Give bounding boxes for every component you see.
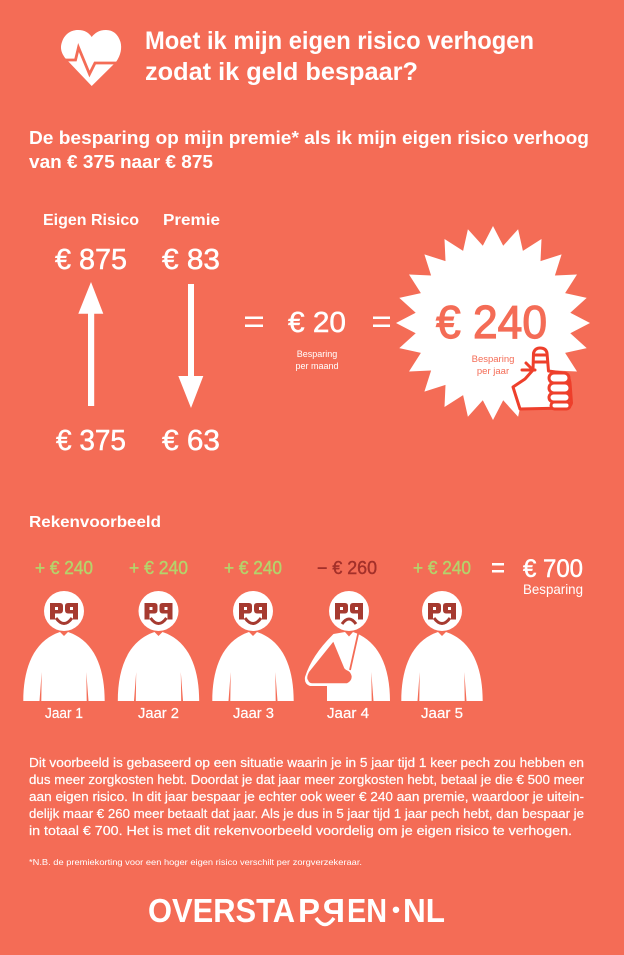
monthly saving <box>288 307 346 371</box>
monthly saving: per maand <box>295 361 339 371</box>
yearly saving label: Besparing <box>472 354 514 365</box>
column headings: Premie <box>163 212 220 229</box>
yearly amounts: + € 240 <box>129 558 188 578</box>
icon: thumbs up <box>513 348 572 409</box>
logo: overstappen.nl <box>148 892 445 929</box>
explanation paragraph: delijk maar € 260 meer betaalt dat jaar. Als je dus in 5 jaar tijd 1 jaar pech hebt, dan bespaar je <box>29 807 584 821</box>
logo: overstappen.nl: NL <box>403 892 445 929</box>
year labels: Jaar 5 <box>421 706 463 722</box>
explanation paragraph: Dit voorbeeld is gebaseerd op een situatie waarin je in 5 jaar tijd 1 keer pech zou hebben en <box>29 756 584 770</box>
arrow up <box>78 282 103 406</box>
column headings: Eigen Risico <box>43 212 139 229</box>
title <box>145 27 534 86</box>
year labels: Jaar 2 <box>138 706 179 722</box>
explanation paragraph: dus meer zorgkosten hebt. Doordat je dat jaar meer zorgkosten hebt, betaal je die € 500 meer <box>29 773 584 787</box>
eigen risico high value: € 875 <box>55 244 127 276</box>
year labels: Jaar 1 <box>45 706 83 722</box>
icon: heart with heartbeat <box>61 30 121 86</box>
yearly amounts <box>35 558 471 578</box>
person: jaar 3 <box>212 591 294 701</box>
equals sign <box>492 563 504 572</box>
logo: overstappen.nl: OVERSTA <box>148 892 295 929</box>
section heading: rekenvoorbeeld: Rekenvoorbeeld <box>29 514 161 531</box>
explanation paragraph: in totaal € 700. Het is met dit rekenvoorbeeld voordelig om je eigen risico te verhogen. <box>29 824 572 838</box>
person: jaar 1 <box>23 591 105 701</box>
explanation paragraph: aan eigen risico. In dit jaar bespaar je echter ook weer € 240 aan premie, waardoor je uitein- <box>29 790 584 804</box>
monthly saving: € 20 <box>288 307 346 339</box>
explanation paragraph <box>29 756 584 838</box>
subtitle: De besparing op mijn premie* als ik mijn eigen risico verhoog <box>29 127 589 148</box>
footnote: *N.B. de premiekorting voor een hoger eigen risico verschilt per zorgverzekeraar. <box>29 857 362 867</box>
premie low value: € 63 <box>162 425 220 457</box>
equals sign <box>373 316 390 327</box>
total saving <box>523 555 583 597</box>
starburst badge <box>396 226 590 420</box>
person: jaar 2 <box>118 591 199 701</box>
yearly saving label: per jaar <box>477 366 509 377</box>
year labels: Jaar 3 <box>233 706 274 722</box>
eigen risico low value: € 375 <box>56 425 126 457</box>
equals sign <box>245 316 263 327</box>
title: Moet ik mijn eigen risico verhogen <box>145 27 534 55</box>
logo: overstappen.nl: P <box>323 892 345 929</box>
yearly saving label <box>472 354 514 377</box>
logo: overstappen.nl: P <box>298 892 320 929</box>
title: zodat ik geld bespaar? <box>145 58 418 86</box>
person: jaar 5 <box>401 591 483 701</box>
premie high value: € 83 <box>162 244 220 276</box>
logo: overstappen.nl: EN <box>347 892 387 929</box>
yearly saving amount: € 240 <box>436 296 547 348</box>
subtitle <box>29 127 589 172</box>
arrow down <box>178 284 203 408</box>
total saving: € 700 <box>523 555 583 583</box>
column headings <box>43 212 220 229</box>
monthly saving: Besparing <box>297 349 337 359</box>
total saving: Besparing <box>523 581 583 597</box>
year labels: Jaar 4 <box>327 706 369 722</box>
yearly amounts: + € 240 <box>35 558 93 578</box>
person: jaar 4 with arm in sling <box>305 591 390 701</box>
yearly amounts: + € 240 <box>224 558 282 578</box>
subtitle: van € 375 naar € 875 <box>29 151 213 172</box>
logo: overstappen.nl: • <box>392 897 400 922</box>
yearly amounts: + € 240 <box>413 558 471 578</box>
year labels <box>45 706 463 722</box>
yearly amounts: − € 260 <box>317 558 377 578</box>
